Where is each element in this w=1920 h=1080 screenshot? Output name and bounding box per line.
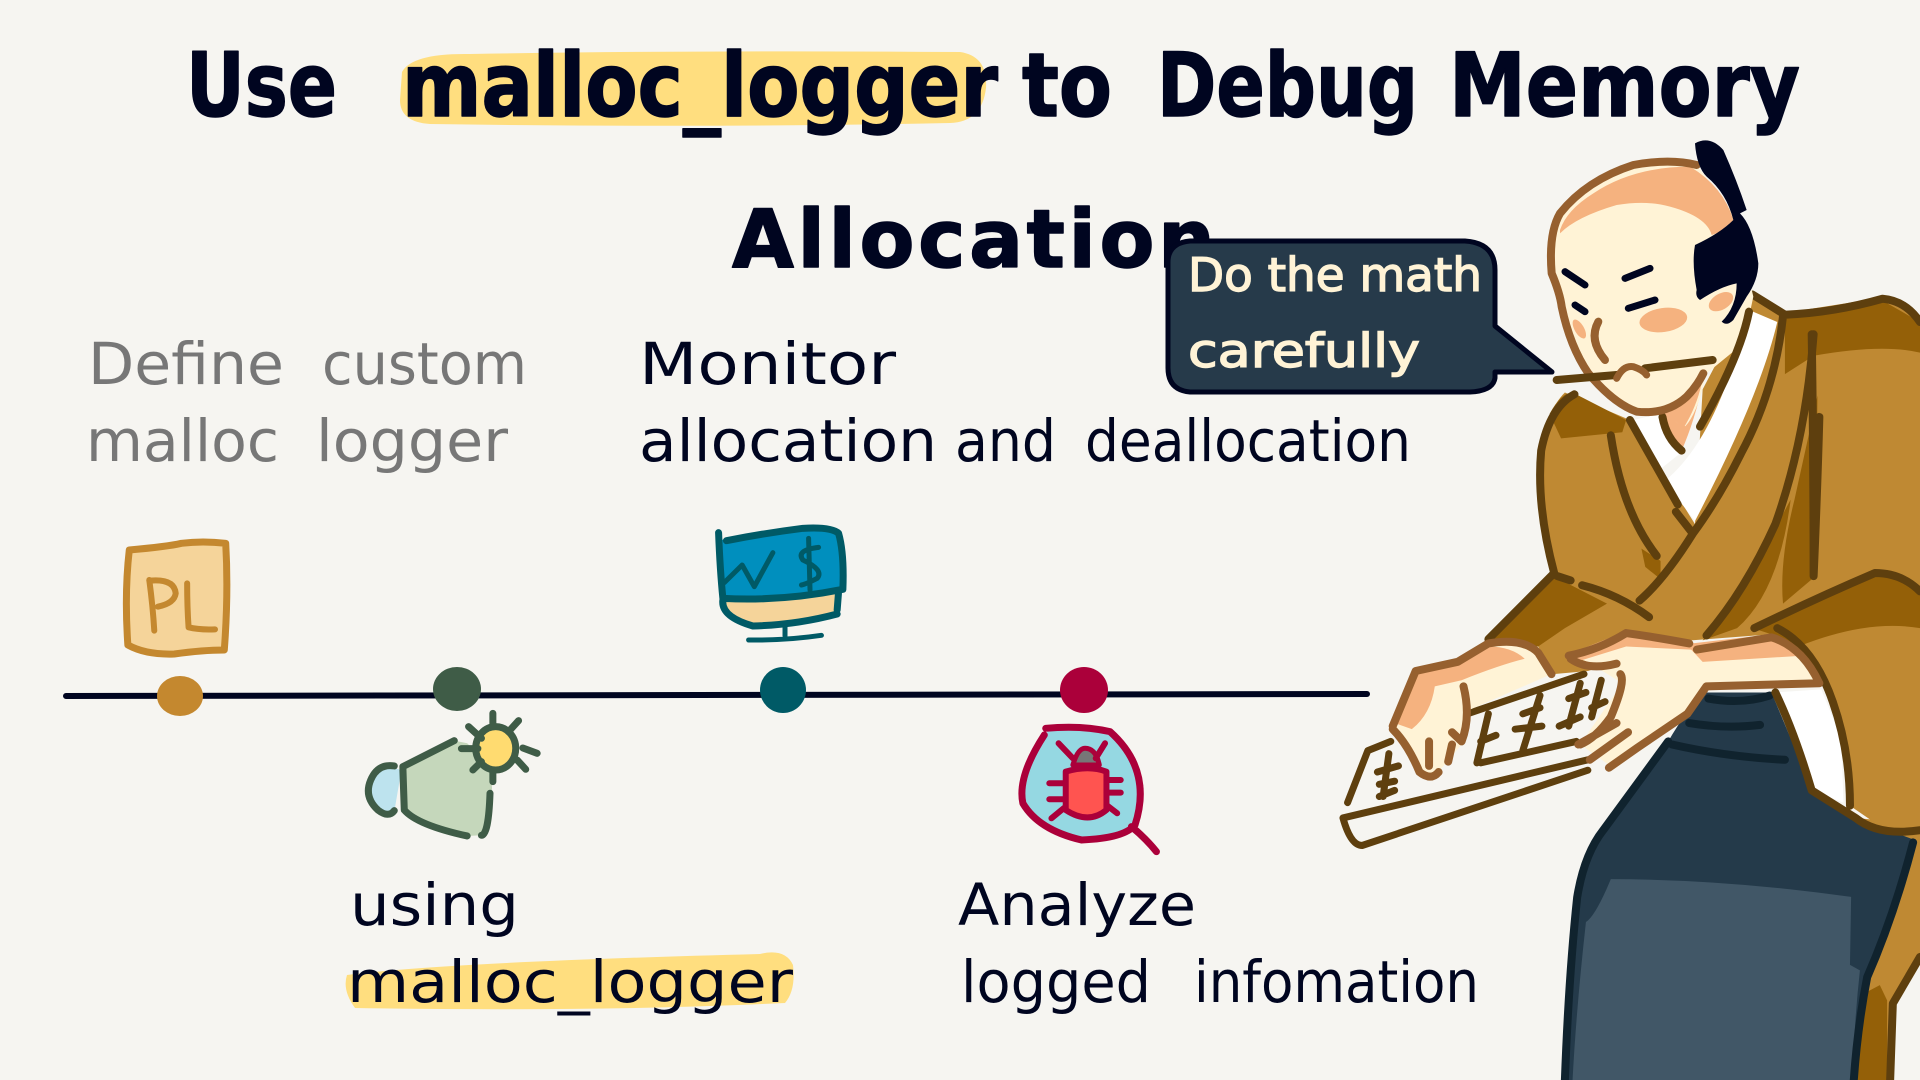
- face: [1551, 162, 1753, 412]
- timeline: [66, 694, 1367, 696]
- icon: PL document: [126, 542, 227, 654]
- speech bubble: Do the math: [1188, 248, 1482, 302]
- step label: analyze logged infomation: infomation: [1194, 948, 1479, 1016]
- step label: using malloc_logger: [346, 871, 794, 1016]
- robe outlines: [1488, 294, 1920, 832]
- cheeks: [1570, 288, 1737, 341]
- neck: [1661, 383, 1703, 451]
- speech bubble: [1168, 241, 1552, 392]
- step label: monitor allocation and deallocation: [639, 330, 1411, 475]
- title: Allocation: [732, 193, 1215, 286]
- lower robe: [1850, 818, 1920, 1080]
- title: Memory: [1449, 34, 1800, 137]
- timeline dot: teal: [760, 667, 806, 713]
- white collar: [1634, 310, 1777, 521]
- right hand: [1571, 634, 1819, 769]
- speech bubble: carefully: [1188, 324, 1420, 378]
- step label: analyze logged infomation: Analyze: [958, 871, 1196, 939]
- step label: using malloc_logger: malloc_logger: [347, 948, 793, 1016]
- stick: [1557, 360, 1713, 380]
- title: [186, 34, 1800, 286]
- hakama skirt: [1563, 692, 1913, 1080]
- step label: monitor allocation and deallocation: allocation: [639, 407, 937, 475]
- collar line: [1700, 312, 1749, 427]
- title: to: [1022, 34, 1112, 137]
- step label: monitor allocation and deallocation: and: [955, 407, 1056, 475]
- timeline dot: gold: [157, 676, 203, 716]
- icon: magnifier with bug: [1022, 727, 1156, 852]
- character: samurai with abacus: [1343, 140, 1920, 1080]
- nose: [1595, 322, 1605, 360]
- step label: define custom malloc logger: [86, 330, 527, 475]
- scalp shade: [1560, 167, 1733, 235]
- title highlight: [400, 51, 986, 126]
- moustache: [1617, 366, 1647, 378]
- icon: monitor: [719, 528, 843, 640]
- timeline dot: green: [433, 667, 481, 711]
- eyebrows and eyes: [1565, 268, 1655, 312]
- neck shade: [1667, 383, 1702, 428]
- step label: define custom malloc logger: Define: [88, 330, 284, 398]
- icon: green hand with sun bug: [367, 713, 537, 836]
- step label: monitor allocation and deallocation: deallocation: [1085, 407, 1411, 475]
- head: [1551, 140, 1758, 428]
- step label: analyze logged infomation: logged: [961, 948, 1151, 1016]
- body and abacus: [1343, 294, 1920, 1080]
- step label: define custom malloc logger: logger: [316, 407, 508, 475]
- timeline dot: crimson: [1060, 667, 1108, 713]
- left hand: [1393, 642, 1552, 776]
- title: malloc_logger: [402, 34, 999, 137]
- robe body: [1488, 294, 1920, 833]
- title: Debug: [1157, 34, 1418, 137]
- step label: using malloc_logger: using: [350, 871, 519, 939]
- title: Use: [186, 34, 337, 137]
- white under-robe at waist: [1775, 689, 1843, 803]
- abacus: [1343, 674, 1622, 846]
- step label: define custom malloc logger: malloc: [86, 407, 279, 475]
- robe shading: [1488, 301, 1920, 647]
- face outline: [1551, 162, 1703, 412]
- step label: define custom malloc logger: custom: [322, 330, 527, 398]
- step label: monitor allocation and deallocation: Monitor: [639, 330, 896, 398]
- hair: [1694, 140, 1758, 324]
- step label: analyze logged infomation: [958, 871, 1479, 1016]
